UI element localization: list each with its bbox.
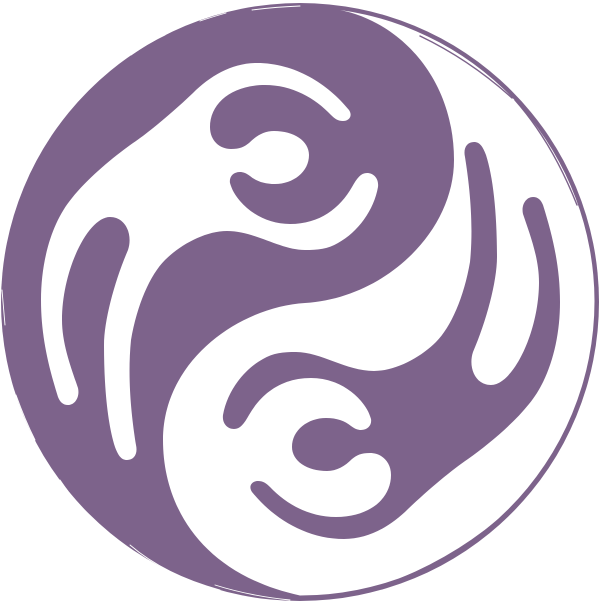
purple hand in white half [223, 142, 560, 539]
white swirl half [163, 10, 594, 596]
white hand in purple half [41, 63, 378, 460]
